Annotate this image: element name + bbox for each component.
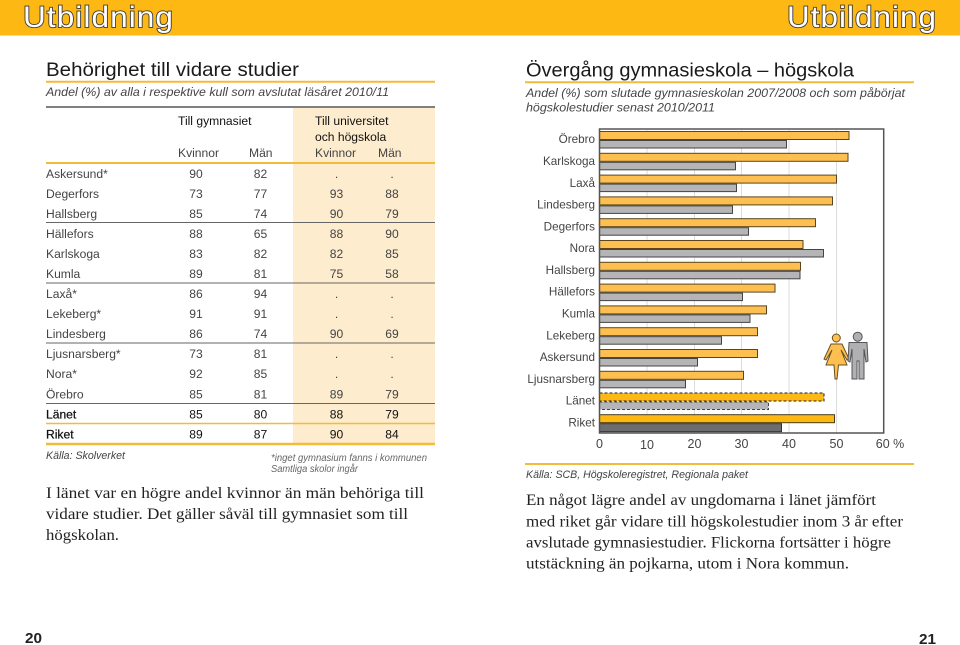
- table header: och högskola: [315, 130, 387, 144]
- table rows: Ljusnarsberg*: [46, 347, 121, 361]
- bars: Lindesberg: [600, 197, 832, 213]
- gridlines: [647, 130, 836, 433]
- category labels: [527, 133, 596, 430]
- table rows: .: [390, 367, 394, 381]
- header band: [0, 0, 960, 36]
- table rows: 73: [189, 187, 203, 201]
- table rows: 85: [189, 408, 203, 422]
- table rows: 90: [330, 327, 343, 341]
- table rows: 88: [330, 227, 343, 241]
- table rows: Karlskoga: [46, 247, 100, 261]
- category labels: Karlskoga: [543, 155, 595, 168]
- text block right: [526, 492, 904, 572]
- footnote: Samtliga skolor ingår: [271, 463, 359, 475]
- axis labels: 30: [735, 437, 748, 451]
- bars: Örebro: [600, 132, 849, 148]
- icon: man: [848, 332, 868, 379]
- table rows: 69: [385, 327, 399, 341]
- footnote: *inget gymnasium fanns i kommunen: [271, 453, 427, 464]
- table rows: 65: [254, 227, 267, 241]
- axis labels: 50: [830, 437, 843, 451]
- table rows: 80: [254, 408, 267, 422]
- text block left: I länet var en högre andel kvinnor än män behöriga till: [46, 485, 425, 502]
- text block right: En något lägre andel av ungdomarna i länet jämfört: [526, 492, 877, 509]
- text block right: utstäckning än pojkarna, utom i Nora kommun.: [526, 556, 849, 572]
- table rows: 79: [385, 207, 399, 221]
- table rows: .: [390, 167, 394, 181]
- table rows: 88: [385, 187, 399, 201]
- table rows: 89: [189, 428, 203, 442]
- text block left: [46, 485, 425, 544]
- table rows: Lindesberg: [46, 327, 106, 341]
- heading: Behörighet till vidare studier: Behörighet till vidare studier: [46, 59, 300, 81]
- table rows: .: [335, 167, 338, 181]
- table rows: 88: [189, 227, 203, 241]
- category labels: Kumla: [562, 308, 595, 320]
- bars: Nora: [600, 240, 824, 257]
- table rows: Nora*: [46, 367, 77, 381]
- bars: Hällefors: [600, 284, 775, 301]
- table: behörighet: [46, 107, 435, 444]
- bars: Ljusnarsberg: [600, 371, 744, 388]
- category labels: Riket: [568, 416, 596, 430]
- text block left: högskolan.: [46, 527, 119, 544]
- table rows: 85: [189, 207, 203, 221]
- table rows: 94: [254, 287, 267, 301]
- axis labels: 0: [596, 437, 603, 451]
- table rows: 82: [330, 247, 343, 261]
- bars: Hallsberg: [600, 262, 800, 279]
- table rows: 90: [385, 227, 399, 241]
- bars: Degerfors: [600, 219, 816, 235]
- table header: Kvinnor: [178, 146, 219, 160]
- chart frame: [600, 129, 884, 433]
- category labels: Länet: [566, 394, 596, 408]
- table rows: Länet: [46, 408, 77, 422]
- bars: Laxå: [600, 175, 836, 192]
- chart bottom rule: [525, 463, 914, 465]
- category labels: Lindesberg: [537, 198, 595, 212]
- axis labels: 60 %: [876, 437, 904, 451]
- table rows: 81: [254, 388, 267, 402]
- table rows: .: [335, 347, 338, 361]
- table rows: .: [390, 287, 394, 301]
- table rows: Hallsberg: [46, 207, 97, 221]
- table rows: Riket: [46, 428, 74, 442]
- text block left: vidare studier. Det gäller såväl till gymnasiet som till: [46, 506, 409, 523]
- table rows: .: [335, 287, 338, 301]
- table rows: 86: [189, 287, 203, 301]
- table rows: [46, 167, 399, 442]
- table rows: Askersund*: [46, 167, 108, 181]
- table rows: 79: [385, 388, 399, 402]
- table rows: 90: [330, 428, 343, 442]
- table rows: Lekeberg*: [46, 307, 101, 321]
- table rows: 74: [254, 207, 267, 221]
- category labels: Hällefors: [549, 286, 595, 298]
- table rows: 89: [189, 267, 203, 281]
- bars: Riket: [600, 415, 834, 432]
- category labels: Lekeberg: [546, 330, 595, 342]
- table rows: Örebro: [46, 388, 84, 402]
- category labels: Hallsberg: [546, 264, 595, 277]
- category labels: Örebro: [559, 133, 595, 146]
- table rows: .: [390, 307, 394, 321]
- table rows: 87: [254, 428, 267, 442]
- table rows: 83: [189, 247, 203, 261]
- table rows: Degerfors: [46, 187, 99, 201]
- category labels: Nora: [570, 242, 595, 255]
- table header: [178, 114, 402, 160]
- source left: Källa: Skolverket: [46, 450, 126, 462]
- table header: Till universitet: [315, 114, 389, 128]
- table rows: 85: [189, 388, 203, 402]
- table header: Till gymnasiet: [178, 114, 252, 128]
- table header: Män: [378, 146, 402, 160]
- axis labels: 20: [688, 437, 701, 451]
- category labels: Askersund: [540, 351, 595, 364]
- table rows: 81: [254, 267, 267, 281]
- table header: Män: [249, 146, 273, 160]
- header title right: Utbildning: [787, 1, 937, 34]
- header title left: Utbildning: [23, 1, 174, 34]
- table rows: 73: [189, 347, 203, 361]
- icon: woman: [824, 334, 849, 379]
- table rows: 79: [385, 408, 399, 422]
- source right: Källa: SCB, Högskoleregistret, Regionala paket: [526, 469, 749, 481]
- table rows: 93: [330, 187, 343, 201]
- table rows: Hällefors: [46, 227, 94, 241]
- table rows: .: [335, 307, 338, 321]
- table rows: 58: [385, 267, 399, 281]
- category labels: Ljusnarsberg: [527, 373, 595, 386]
- table rows: 74: [254, 327, 267, 341]
- subtitle right: [525, 86, 906, 114]
- subtitle left: Andel (%) av alla i respektive kull som avslutat läsåret 2010/11: [45, 85, 389, 99]
- table rows: 77: [254, 187, 267, 201]
- table rows: .: [335, 367, 338, 381]
- bars: Kumla: [600, 306, 766, 322]
- table rows: .: [390, 347, 394, 361]
- table rows: 85: [254, 367, 267, 381]
- table rows: 92: [189, 367, 203, 381]
- bar chart: [527, 129, 904, 452]
- table rows: 88: [330, 408, 343, 422]
- bars: Lekeberg: [600, 328, 758, 344]
- table rows: 90: [189, 167, 203, 181]
- text block right: avslutade gymnasiestudier. Flickorna fortsätter i högre: [526, 534, 891, 552]
- subtitle right: högskolestudier senast 2010/2011: [526, 100, 715, 114]
- footnote: [271, 453, 427, 475]
- bars: Länet: [600, 393, 824, 410]
- bars: Karlskoga: [600, 153, 848, 170]
- table rows: 89: [330, 388, 343, 402]
- axis labels: 10: [640, 438, 654, 452]
- axis labels: [596, 437, 904, 452]
- table rows: 86: [189, 327, 203, 341]
- table rows: 91: [189, 307, 203, 321]
- table rows: 82: [254, 167, 267, 181]
- category labels: Degerfors: [544, 220, 595, 234]
- table rows: Kumla: [46, 267, 81, 281]
- table rows: 75: [330, 267, 343, 281]
- table rows: 81: [254, 347, 267, 361]
- axis labels: 40: [782, 437, 796, 451]
- table rows: Laxå*: [46, 287, 77, 301]
- table rows: 90: [330, 207, 343, 221]
- table rows: 91: [254, 307, 267, 321]
- bars: Askersund: [600, 350, 758, 366]
- table rows: 84: [385, 428, 399, 442]
- subtitle right: Andel (%) som slutade gymnasieskolan 2007/2008 och som påbörjat: [525, 86, 906, 100]
- text block right: med riket går vidare till högskolestudier inom 3 år efter: [526, 514, 904, 531]
- heading: Övergång gymnasieskola – högskola: Övergång gymnasieskola – högskola: [526, 60, 854, 82]
- table rows: 85: [385, 247, 399, 261]
- table header: Kvinnor: [315, 146, 356, 160]
- table rows: 82: [254, 247, 267, 261]
- category labels: Laxå: [570, 177, 595, 190]
